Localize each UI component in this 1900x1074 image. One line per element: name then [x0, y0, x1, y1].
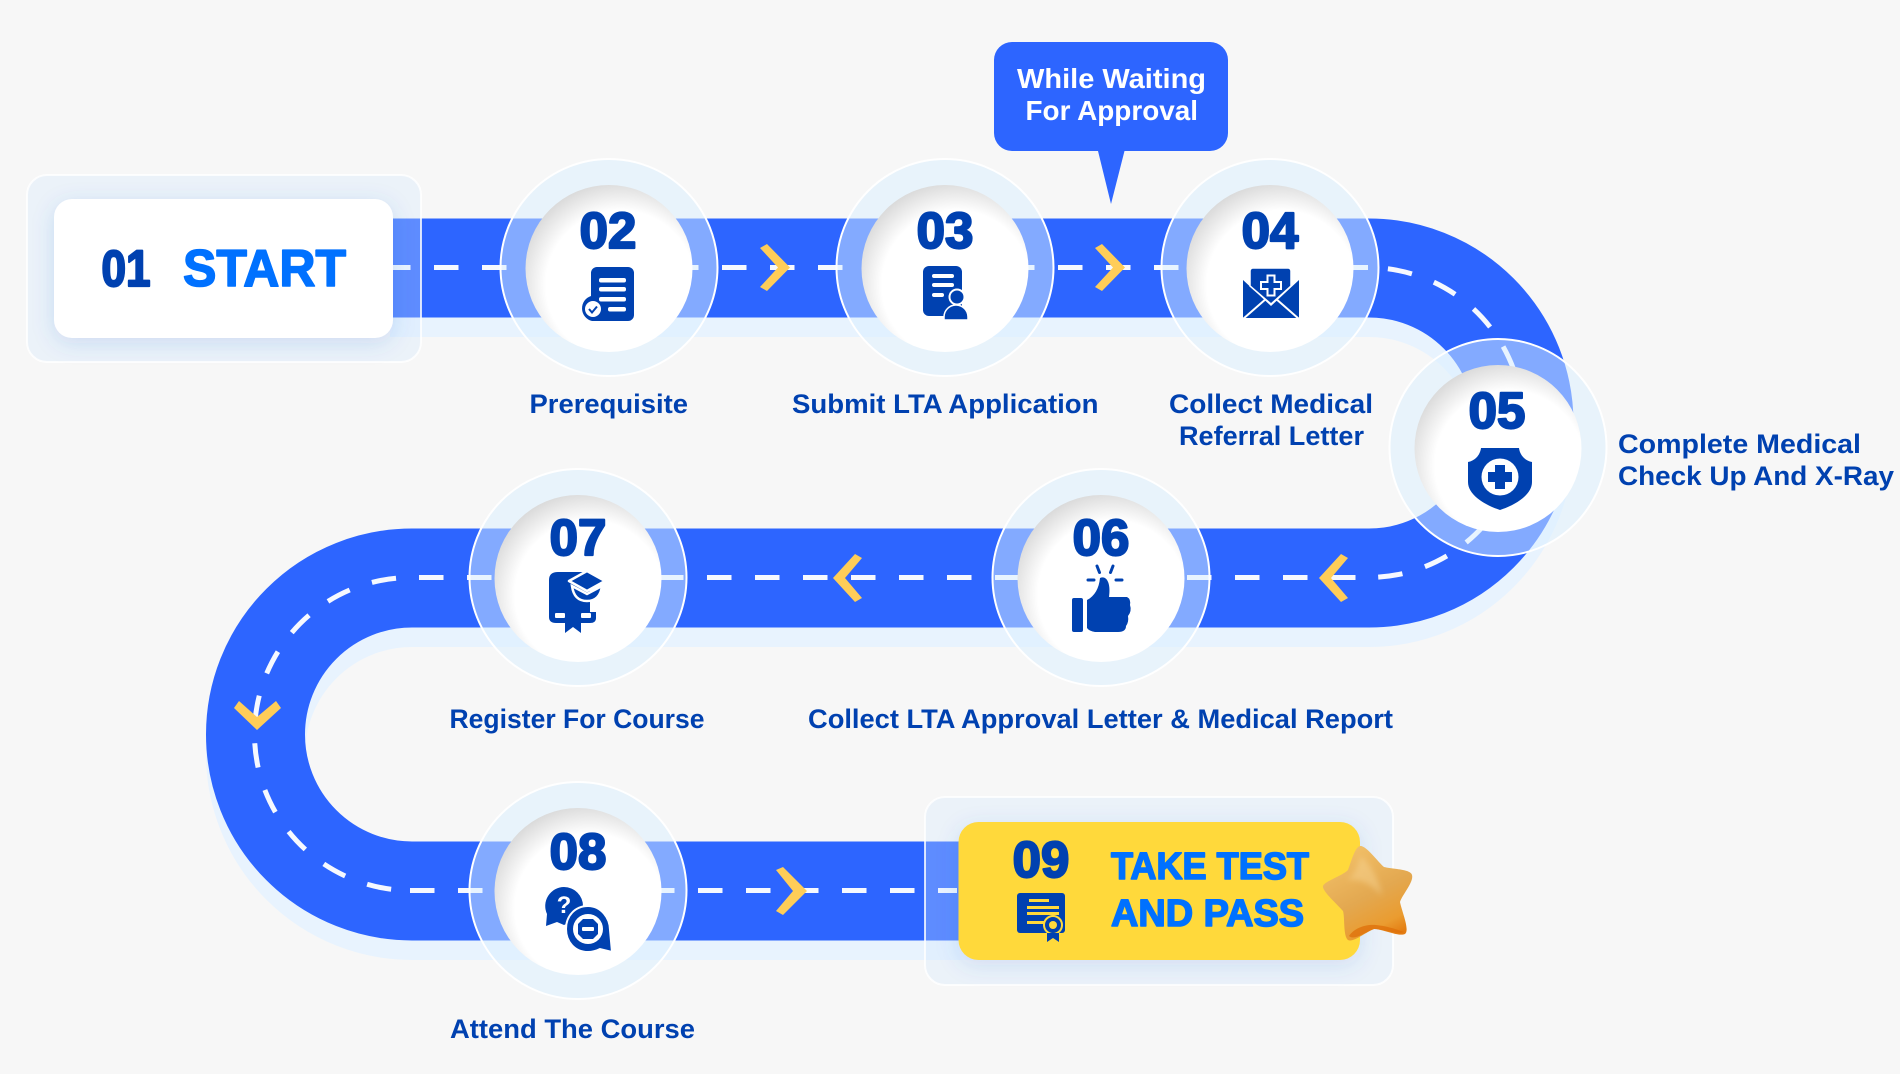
icon: course book with graduation cap: [549, 571, 605, 633]
step 07 register for course: [450, 469, 704, 734]
icon: medical shield: [1468, 448, 1532, 510]
icon: golden star: [1323, 846, 1412, 941]
icon: question and answer bubbles: [545, 887, 612, 952]
panel: step 09 take test and pass: TAKE TEST: [1111, 846, 1309, 888]
label: register for course: Register For Course: [450, 704, 704, 734]
step 03 submit LTA application: 03: [917, 202, 973, 259]
icon: question and answer bubbles: ?: [557, 892, 571, 919]
arrow: road direction 1: [760, 244, 790, 291]
arrow: road direction 5: [234, 701, 281, 730]
callout: while waiting for approval: For Approval: [1026, 95, 1198, 126]
label: collect medical referral letter: [1169, 389, 1373, 451]
icon: thumbs up: [1072, 566, 1131, 632]
step 04 collect medical referral letter: [1162, 159, 1378, 451]
panel: step 01 start: 01: [102, 240, 150, 297]
winding road: [256, 268, 1524, 891]
arrow: road direction 4: [1319, 554, 1348, 602]
road shadow: [256, 288, 1524, 910]
arrow: road direction 2: [1095, 244, 1125, 291]
panel: step 09 take test and pass: 09: [1013, 831, 1069, 888]
label: complete medical check up and x-ray: [1618, 429, 1894, 491]
label: attend the course: Attend The Course: [450, 1014, 695, 1044]
step 03 submit LTA application: [792, 159, 1098, 419]
arrow: road direction 6: [776, 867, 807, 915]
panel: step 01 start: [27, 175, 421, 362]
label: complete medical check up and x-ray: Check Up And X-Ray: [1618, 461, 1894, 491]
label: collect medical referral letter: Referral Letter: [1179, 421, 1364, 451]
callout: while waiting for approval: While Waiting: [1017, 63, 1206, 94]
panel: step 09 take test and pass: [925, 797, 1393, 985]
step 07 register for course: 07: [550, 509, 606, 566]
icon: checklist document: [582, 267, 634, 321]
step 04 collect medical referral letter: 04: [1242, 202, 1299, 259]
step 06 collect LTA approval letter: [808, 469, 1393, 734]
panel: step 01 start: START: [183, 240, 346, 298]
icon: medical envelope: [1243, 268, 1299, 319]
road centre dashes: [255, 268, 1523, 890]
label: collect LTA approval letter and medical report: Collect LTA Approval Letter & Medical Report: [808, 704, 1393, 734]
label: prerequisite: Prerequisite: [530, 389, 688, 419]
icon: application form with person: [923, 266, 968, 320]
panel: step 09 take test and pass: AND PASS: [1111, 893, 1304, 935]
label: submit LTA application: Submit LTA Application: [792, 389, 1098, 419]
callout: while waiting for approval: [994, 42, 1228, 204]
step 08 attend the course: [450, 782, 695, 1044]
label: collect medical referral letter: Collect Medical: [1169, 389, 1373, 419]
arrow: road direction 3: [833, 554, 862, 602]
step 02 prerequisite: [500, 159, 718, 419]
icon: certificate: [1017, 893, 1065, 942]
label: complete medical check up and x-ray: Complete Medical: [1618, 429, 1861, 459]
step 05 complete medical check up: 05: [1469, 382, 1525, 439]
step 06 collect LTA approval letter: 06: [1073, 509, 1129, 566]
step 02 prerequisite: 02: [580, 202, 636, 259]
step 05 complete medical check up: [1390, 339, 1894, 556]
step 08 attend the course: 08: [550, 823, 606, 880]
